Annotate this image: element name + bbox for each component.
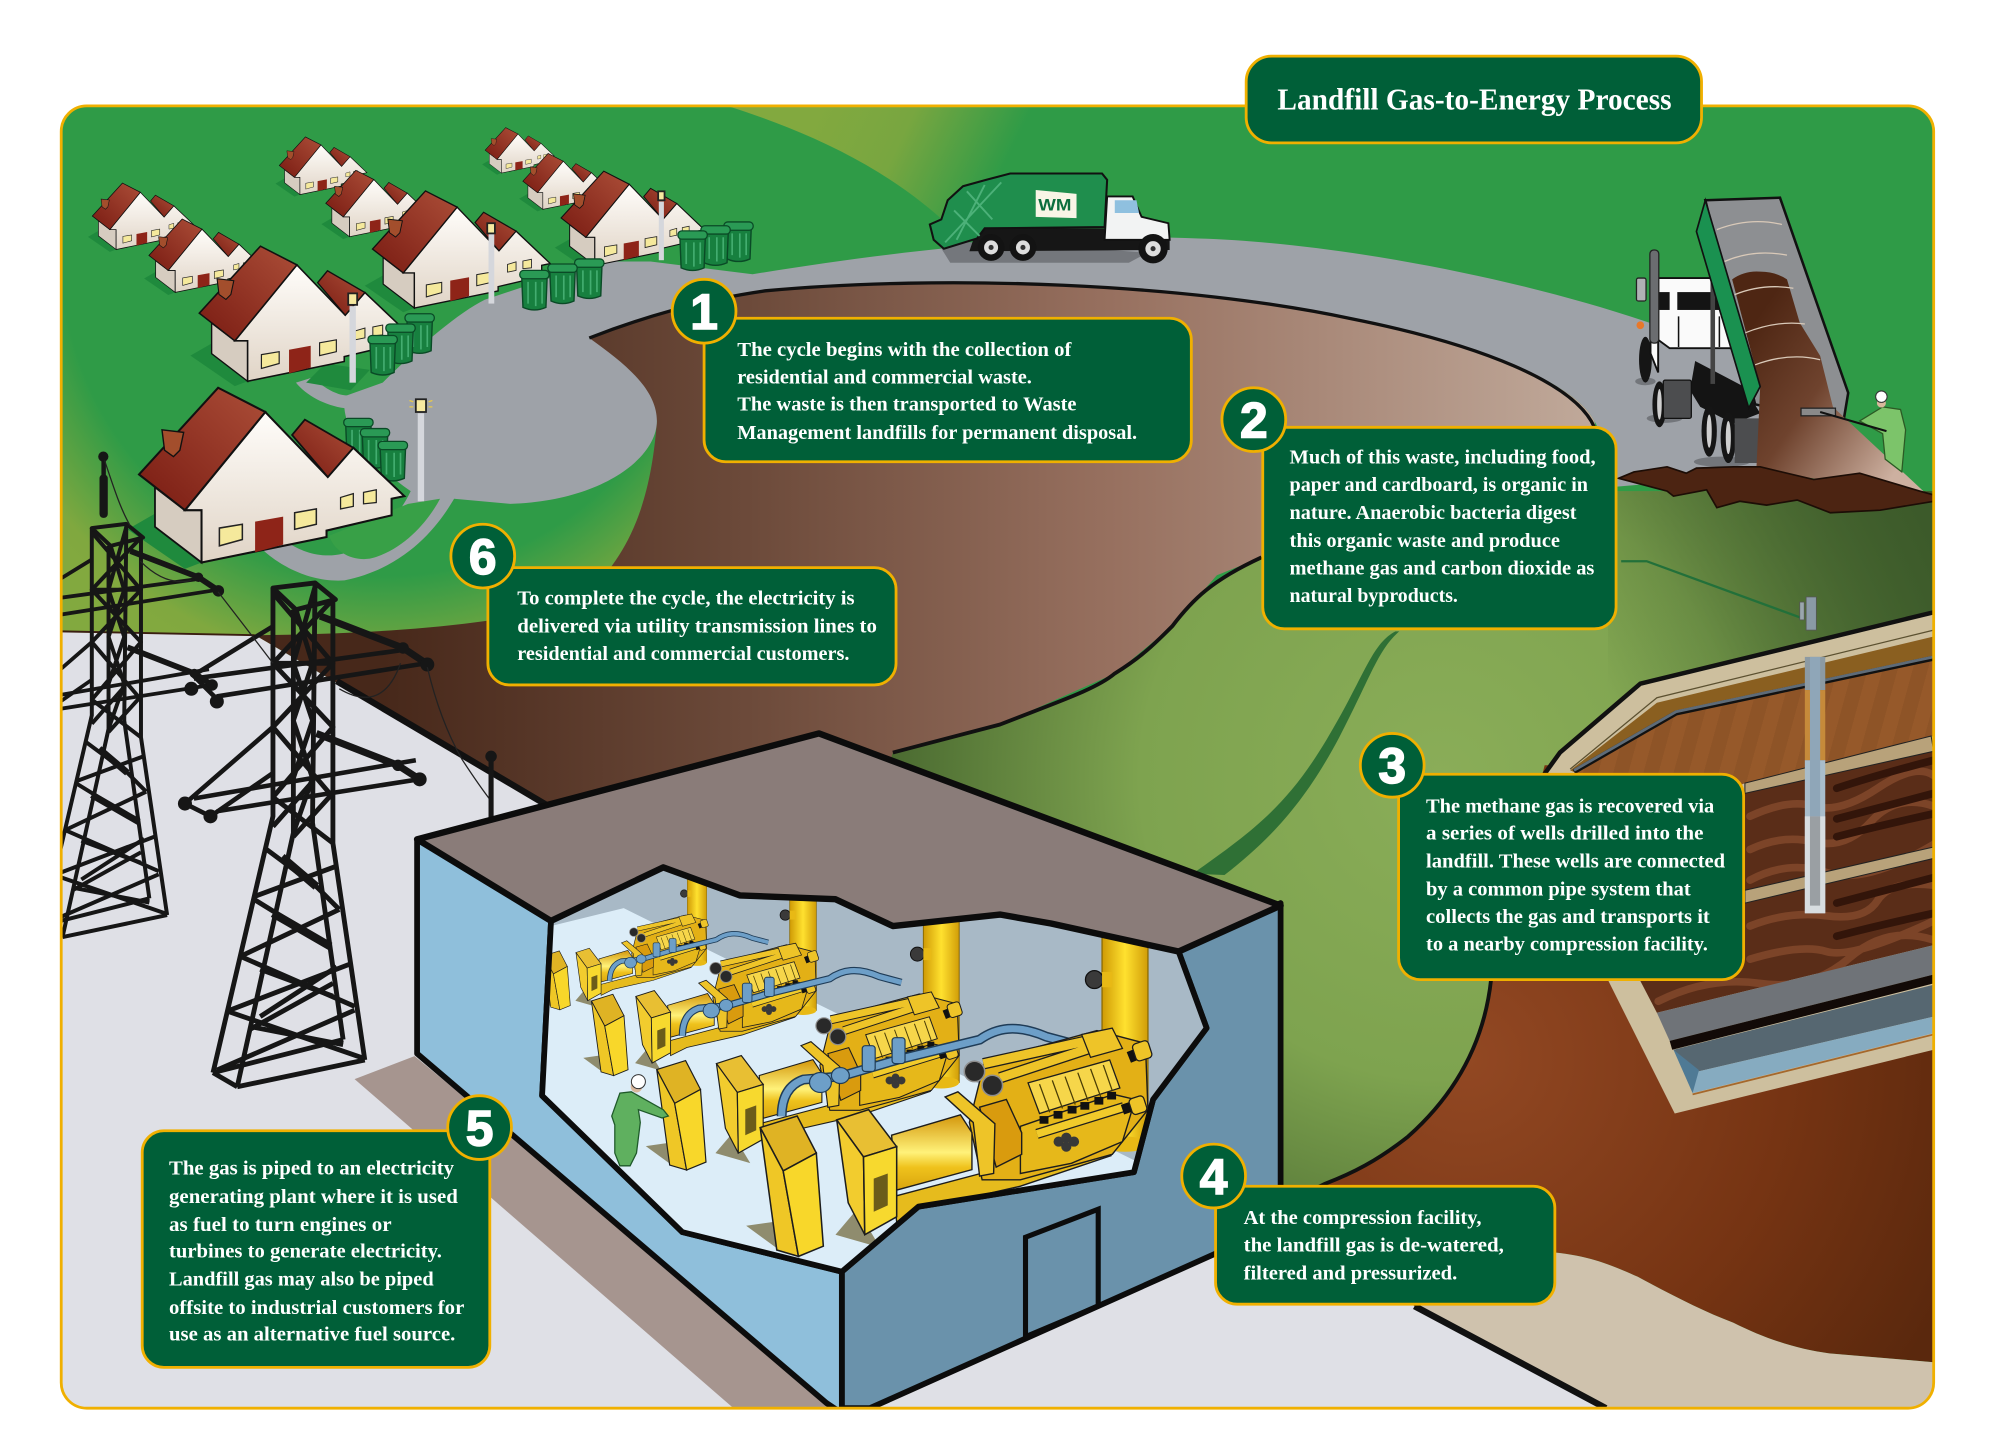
step number 2: 2 [1240, 393, 1268, 449]
text: step 5: use as an alternative fuel source. [169, 1324, 455, 1346]
text: step 2: this organic waste and produce [1290, 530, 1560, 552]
step number 2 [1222, 388, 1286, 452]
text: step 1: The cycle begins with the collection of [737, 339, 1072, 361]
text: step 1: The waste is then transported to Waste [737, 394, 1077, 416]
title [1246, 56, 1702, 143]
title: Landfill Gas-to-Energy Process [1277, 83, 1672, 117]
background: concrete ground [61, 631, 1607, 1408]
step number 5 [448, 1096, 511, 1159]
grass patch by driveway [329, 499, 440, 559]
underground gas pipe [1193, 631, 1399, 875]
interior: back wall [554, 870, 1204, 1160]
text: step 3: The methane gas is recovered via [1426, 796, 1714, 818]
text: step 4: At the compression facility, [1244, 1207, 1482, 1229]
tower spire [98, 452, 108, 518]
text: step 3: landfill. These wells are connected [1426, 850, 1725, 872]
generating plant building [417, 733, 1281, 1413]
step number 5: 5 [466, 1100, 493, 1156]
garbage truck [930, 173, 1170, 263]
step number 1 [672, 279, 736, 343]
callout 1 [672, 279, 1191, 462]
step number 6: 6 [469, 529, 497, 585]
landfill cross-section [1543, 597, 1934, 1114]
callout 6 [451, 524, 896, 685]
step number 3: 3 [1378, 738, 1406, 794]
gas well [1800, 597, 1825, 913]
text: step 2: methane gas and carbon dioxide as [1290, 558, 1595, 580]
waste heap on ground [1619, 467, 1934, 513]
background: orange earth [1328, 765, 1932, 1362]
tower: front [178, 583, 434, 1087]
generator engines [538, 871, 1153, 1256]
step number 6 [451, 524, 515, 588]
text: step 5: offsite to industrial customers for [169, 1297, 465, 1319]
callout 3 [1360, 733, 1744, 980]
step number 4 [1182, 1144, 1246, 1208]
dump truck [1619, 198, 1934, 513]
worker with rake [1820, 391, 1906, 472]
door [1026, 1209, 1098, 1337]
text: step 2: nature. Anaerobic bacteria digest [1290, 502, 1577, 524]
power lines [105, 460, 491, 801]
interior cut outline [542, 921, 1207, 1272]
text: step 5: Landfill gas may also be piped [169, 1269, 434, 1291]
callout 4 [1182, 1144, 1555, 1304]
text: step 3: by a common pipe system that [1426, 878, 1691, 900]
callout 2 [1222, 388, 1616, 629]
step number 3 [1360, 733, 1424, 797]
trash bins [368, 222, 753, 375]
tower: rear [62, 522, 224, 939]
text: step 5: The gas is piped to an electricity [169, 1158, 454, 1180]
text: step 1: Management landfills for permanent disposal. [737, 422, 1137, 444]
callout 5 [142, 1096, 511, 1367]
text: step 4: the landfill gas is de-watered, [1244, 1234, 1504, 1256]
right wall [842, 903, 1281, 1408]
text: step 6: residential and commercial customers. [517, 643, 850, 665]
text: step 5: generating plant where it is used [169, 1186, 458, 1208]
text: step 5: as fuel to turn engines or [169, 1214, 392, 1236]
text: step 3: collects the gas and transports it [1426, 906, 1710, 928]
plant worker [612, 1075, 668, 1166]
background: green slope [880, 491, 1934, 1205]
text: step 1: residential and commercial waste. [737, 366, 1032, 388]
text: step 2: paper and cardboard, is organic in [1290, 474, 1588, 496]
text: step 3: a series of wells drilled into the [1426, 822, 1704, 844]
background: tan ground [1415, 1253, 1934, 1408]
background: landfill mound [255, 283, 1610, 829]
step number 1: 1 [690, 284, 718, 340]
road [261, 237, 1760, 581]
street lamps [348, 191, 665, 501]
text: step 4: filtered and pressurized. [1244, 1262, 1457, 1284]
step number 4: 4 [1200, 1149, 1228, 1205]
shadow of building [355, 1056, 842, 1408]
roof [417, 733, 1281, 952]
houses neighbourhood [88, 128, 704, 569]
text: step 3: to a nearby compression facility. [1426, 933, 1708, 955]
surface gas line [1621, 561, 1800, 617]
text: step 5: turbines to generate electricity. [169, 1241, 442, 1263]
garbage truck: WM [1038, 195, 1071, 214]
left wall [417, 839, 842, 1413]
falling waste pile [1732, 272, 1926, 494]
text: step 2: Much of this waste, including food, [1290, 447, 1596, 469]
text: step 2: natural byproducts. [1290, 585, 1458, 607]
text: step 6: delivered via utility transmission lines to [517, 616, 877, 638]
interior: floor [542, 908, 1148, 1272]
transmission towers [14, 452, 497, 1087]
utility pole [485, 751, 497, 819]
text: step 6: To complete the cycle, the electricity is [517, 588, 855, 610]
